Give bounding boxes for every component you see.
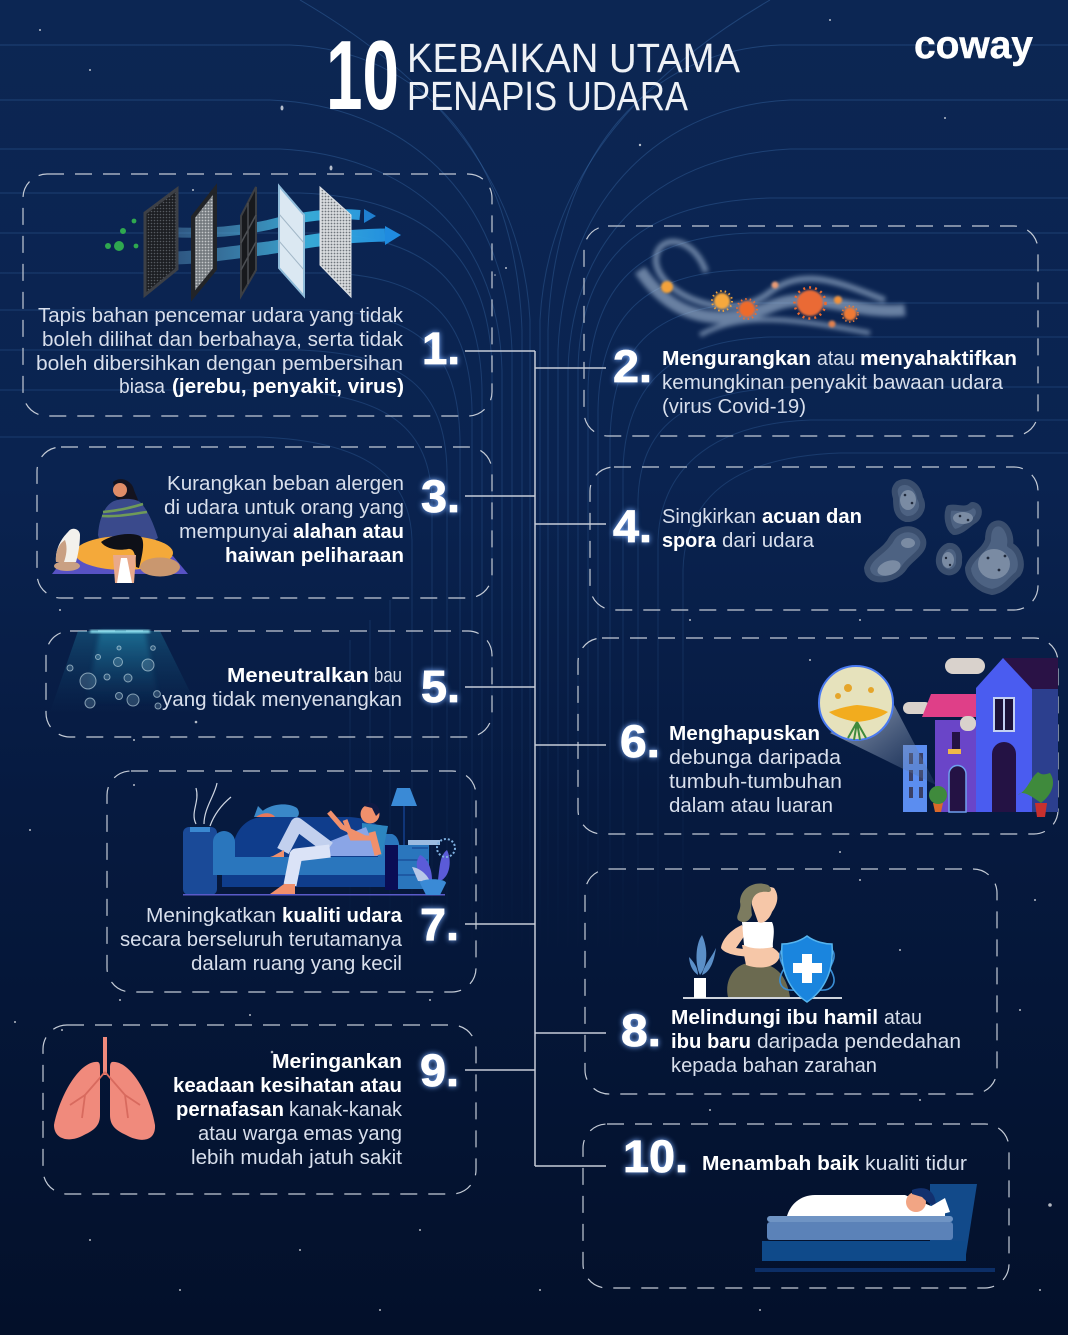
text block: Menambah baik	[702, 1152, 860, 1175]
text block: acuan dan	[762, 505, 862, 528]
number 8: 8.	[621, 1005, 661, 1056]
panel 6: pollen	[578, 638, 1058, 834]
icon: five-layer filter with airflow	[105, 186, 401, 297]
text block: di udara untuk orang yang	[164, 496, 404, 519]
text block: (jerebu, penyakit, virus)	[172, 375, 404, 398]
text block: secara berseluruh terutamanya	[120, 928, 403, 951]
text block: bau	[374, 664, 402, 687]
icon: pregnant woman with shield	[683, 884, 842, 1002]
text block	[671, 1006, 961, 1077]
text block	[669, 722, 842, 817]
icon: person sleeping in bed	[755, 1184, 995, 1272]
text block	[120, 904, 403, 975]
number 4: 4.	[613, 501, 652, 552]
text block: lebih mudah jatuh sakit	[191, 1146, 402, 1169]
text block: kanak-kanak	[289, 1098, 403, 1121]
panel 3: allergens and pets	[37, 447, 492, 598]
text block: kualiti udara	[282, 904, 403, 927]
text block	[164, 472, 404, 567]
text block: tumbuh-tumbuhan	[669, 770, 842, 793]
title: KEBAIKAN UTAMA	[407, 35, 741, 81]
title: 10	[326, 20, 399, 130]
text block: atau	[884, 1006, 922, 1029]
text block	[36, 304, 404, 398]
text block: keadaan kesihatan atau	[173, 1074, 402, 1097]
icon: man on sofa	[183, 783, 455, 896]
title	[326, 20, 741, 130]
text block: haiwan peliharaan	[225, 544, 404, 567]
number 9: 9.	[420, 1045, 459, 1096]
text block: Meningkatkan	[146, 904, 276, 927]
text block: (virus Covid-19)	[662, 395, 806, 418]
text block: yang tidak menyenangkan	[162, 688, 402, 711]
text block: Singkirkan	[662, 505, 756, 528]
number 3: 3.	[421, 471, 460, 522]
text block: Meringankan	[272, 1050, 402, 1073]
text block: Kurangkan beban alergen	[167, 472, 404, 495]
text block: dari udara	[722, 529, 815, 552]
text block: kemungkinan penyakit bawaan udara	[662, 371, 1004, 394]
panel 2: airborne virus	[584, 226, 1038, 436]
text block: boleh dibersihkan dengan pembersihan	[36, 352, 403, 375]
text block: kualiti tidur	[865, 1152, 967, 1175]
connector lines	[465, 351, 606, 1166]
text block: mempunyai	[179, 520, 288, 543]
text block: biasa	[119, 375, 166, 398]
panel 4: mould and spores	[590, 467, 1038, 610]
number 1: 1.	[422, 323, 460, 374]
text block	[662, 505, 862, 552]
text block: Melindungi ibu hamil	[671, 1006, 878, 1029]
air flow lines	[0, 0, 1068, 950]
text block: Tapis bahan pencemar udara yang tidak	[38, 304, 404, 327]
panel 5: odours	[46, 630, 492, 737]
icon: spores	[867, 482, 1021, 592]
text block: Meneutralkan	[227, 664, 369, 687]
text block	[702, 1152, 967, 1175]
text block: Mengurangkan	[662, 347, 811, 370]
text block: atau warga emas yang	[198, 1122, 402, 1145]
panel 7: small room air quality	[107, 771, 476, 992]
icon: house with magnified flower	[819, 658, 1058, 817]
icon: woman with cats	[52, 479, 188, 583]
logo: coway: coway	[914, 24, 1033, 67]
panel 10: sleep	[583, 1124, 1009, 1288]
text block	[162, 664, 402, 711]
panel 9: lungs	[43, 1025, 476, 1194]
number 2: 2.	[613, 341, 652, 392]
text block: debunga daripada	[669, 746, 842, 769]
icon: wind with viruses	[640, 242, 905, 335]
text block: daripada pendedahan	[757, 1030, 961, 1053]
number 6: 6.	[620, 716, 660, 767]
text block: boleh dilihat dan berbahaya, serta tidak	[42, 328, 404, 351]
text block: spora	[662, 529, 717, 552]
title: PENAPIS UDARA	[407, 73, 689, 119]
text block: atau	[817, 347, 855, 370]
icon: lungs	[54, 1037, 155, 1140]
text block	[173, 1050, 403, 1169]
text block: ibu baru	[671, 1030, 751, 1053]
text block	[662, 347, 1017, 418]
text block: Menghapuskan	[669, 722, 820, 745]
panel 8: mothers	[585, 869, 997, 1094]
text block: kepada bahan zarahan	[671, 1054, 877, 1077]
number 7: 7.	[420, 899, 459, 950]
text block: pernafasan	[176, 1098, 284, 1121]
number 5: 5.	[421, 661, 460, 712]
icon: light rays and bubbles	[50, 630, 200, 712]
panel 1: filter layers	[23, 174, 492, 416]
text block: alahan atau	[293, 520, 404, 543]
text block: menyahaktifkan	[860, 347, 1017, 370]
text block: dalam ruang yang kecil	[191, 952, 402, 975]
text block: dalam atau luaran	[669, 794, 833, 817]
number 10: 10.	[623, 1131, 688, 1182]
